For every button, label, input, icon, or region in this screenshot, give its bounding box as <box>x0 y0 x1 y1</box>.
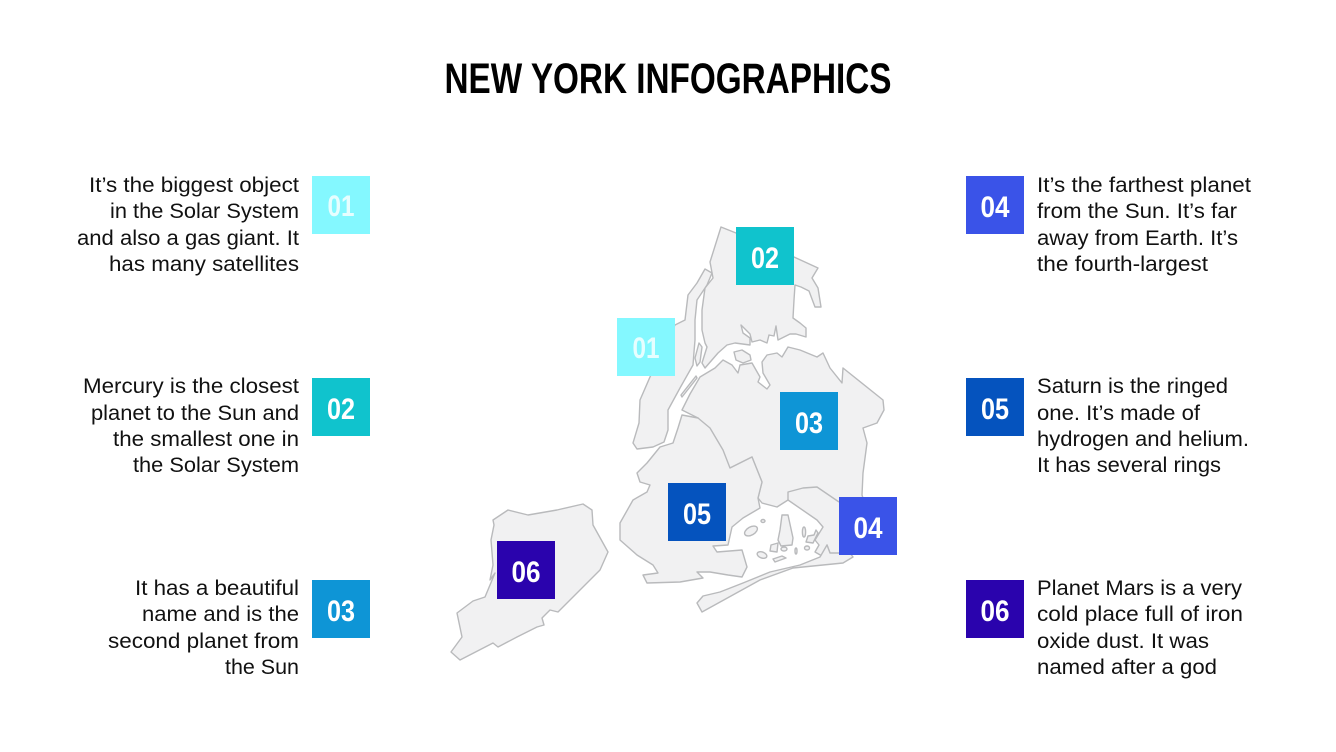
JFK inner border <box>788 487 839 502</box>
text block 06 <box>1037 576 1243 679</box>
map marker 05: 05 <box>683 498 711 531</box>
text block 05: It has several rings <box>1037 453 1221 477</box>
badge 05: 05 <box>981 393 1009 426</box>
item 06 <box>966 576 1243 679</box>
borough: Queens <box>682 347 884 556</box>
text block 03: name and is the <box>142 602 299 626</box>
map marker 01 <box>617 318 675 376</box>
map: New York boroughs <box>451 227 884 660</box>
badge 05 <box>966 378 1024 436</box>
Randall's Island <box>695 343 702 366</box>
map marker 06: 06 <box>512 556 540 589</box>
text block 03: It has a beautiful <box>135 576 299 600</box>
text block 04: the fourth-largest <box>1037 252 1208 276</box>
map marker 05 <box>668 483 726 541</box>
text block 05: Saturn is the ringed <box>1037 374 1228 398</box>
text block 06: named after a god <box>1037 655 1217 679</box>
badge 06 <box>966 580 1024 638</box>
text block 05 <box>1037 374 1249 477</box>
item 03 <box>108 576 370 679</box>
text block 01 <box>77 173 299 276</box>
borough: Staten Island <box>451 504 608 660</box>
text block 01: It’s the biggest object <box>89 173 299 197</box>
badge 01 <box>312 176 370 234</box>
text block 02: Mercury is the closest <box>83 374 299 398</box>
map marker 03 <box>780 392 838 450</box>
item 02 <box>83 374 370 477</box>
text block 02: the smallest one in <box>113 427 299 451</box>
map marker 01: 01 <box>632 332 660 365</box>
badge 02 <box>312 378 370 436</box>
map marker 06 <box>497 541 555 599</box>
map marker 03: 03 <box>795 407 823 440</box>
text block 02 <box>83 374 299 477</box>
text block 02: planet to the Sun and <box>91 401 299 425</box>
text block 06: oxide dust. It was <box>1037 629 1209 653</box>
badge 04: 04 <box>980 191 1010 224</box>
text block 02: the Solar System <box>133 453 299 477</box>
badge 03: 03 <box>327 595 355 628</box>
text block 01: and also a gas giant. It <box>77 226 299 250</box>
map marker 04 <box>839 497 897 555</box>
text block 01: has many satellites <box>109 252 299 276</box>
Roosevelt and Jamaica Bay islands <box>681 350 818 562</box>
text block 06: Planet Mars is a very <box>1037 576 1242 600</box>
title: NEW YORK INFOGRAPHICS <box>444 55 892 103</box>
text block 01: in the Solar System <box>110 199 299 223</box>
badge 01: 01 <box>328 190 354 223</box>
badge 02: 02 <box>327 393 355 426</box>
map marker 02: 02 <box>751 242 779 275</box>
borough: Brooklyn <box>620 415 762 583</box>
text block 03 <box>108 576 299 679</box>
text block 04 <box>1037 173 1251 276</box>
map marker 02 <box>736 227 794 285</box>
badge 06: 06 <box>980 595 1010 628</box>
text block 05: hydrogen and helium. <box>1037 427 1249 451</box>
item 01 <box>77 173 370 276</box>
item 04 <box>966 173 1251 276</box>
text block 03: second planet from <box>108 629 299 653</box>
item 05 <box>966 374 1249 477</box>
borough: Manhattan <box>633 269 712 449</box>
badge 04 <box>966 176 1024 234</box>
text block 04: from the Sun. It’s far <box>1037 199 1237 223</box>
text block 05: one. It’s made of <box>1037 401 1200 425</box>
map marker 04: 04 <box>854 512 883 545</box>
text block 03: the Sun <box>225 655 299 679</box>
text block 04: It’s the farthest planet <box>1037 173 1251 197</box>
text block 06: cold place full of iron <box>1037 602 1243 626</box>
borough: Bronx <box>702 227 821 368</box>
text block 04: away from Earth. It’s <box>1037 226 1238 250</box>
Rockaway peninsula <box>697 545 853 612</box>
badge 03 <box>312 580 370 638</box>
